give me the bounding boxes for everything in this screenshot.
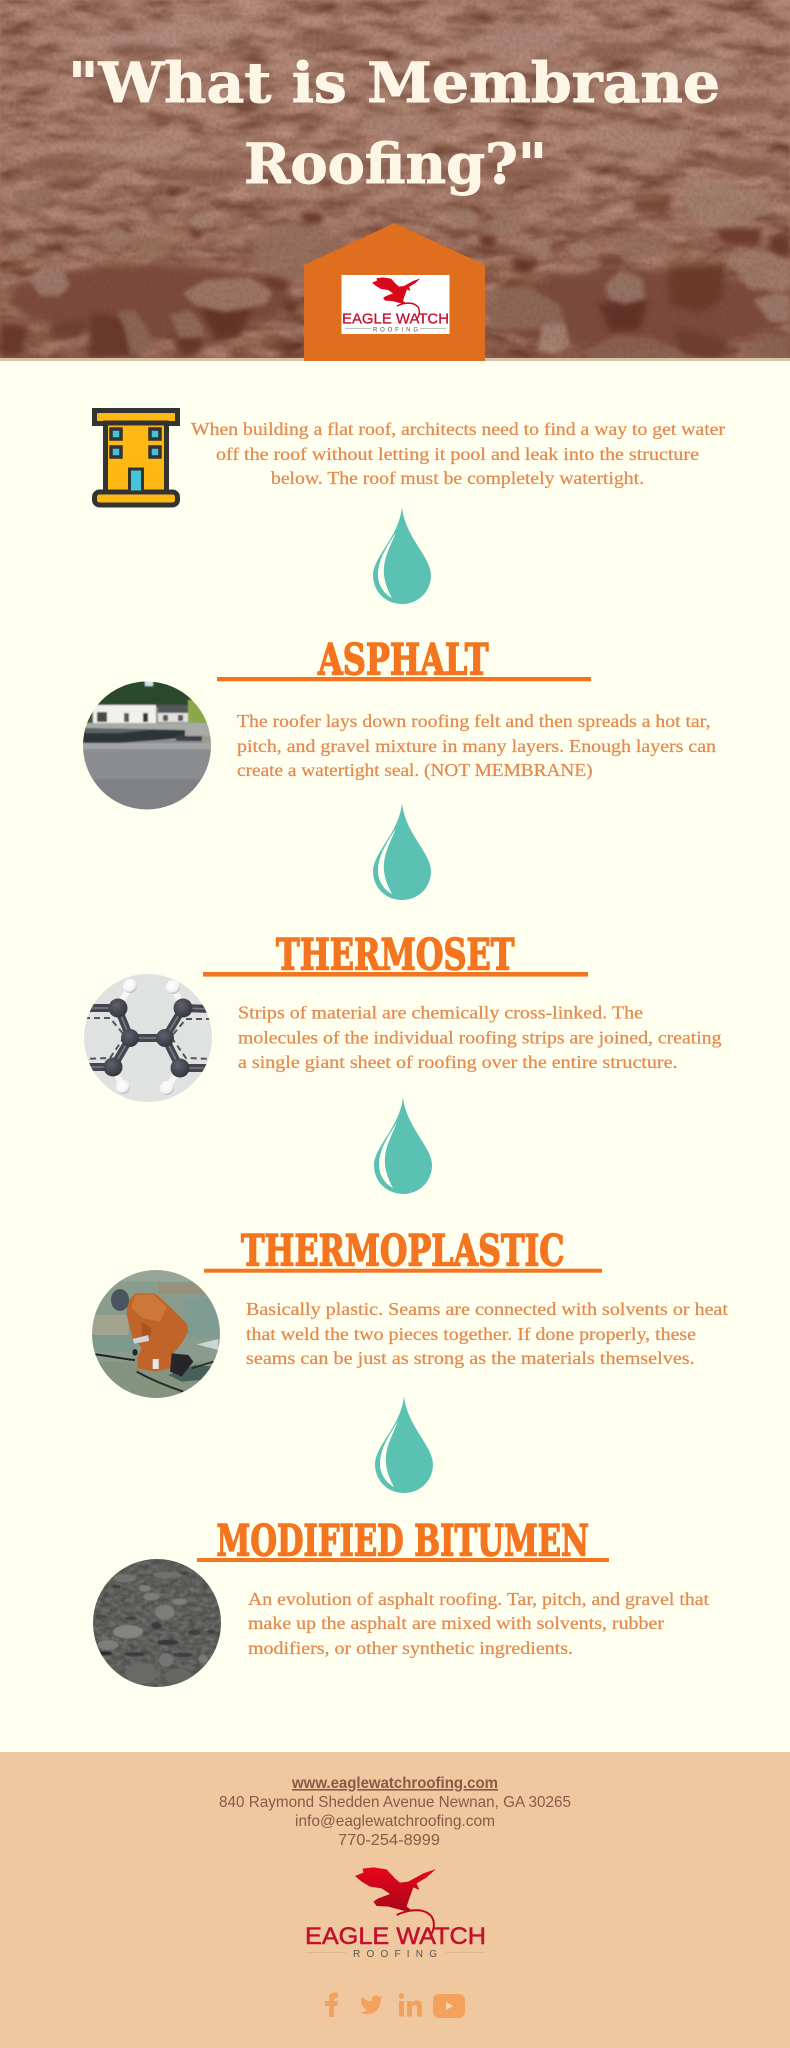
title [68,50,720,196]
intro text: below. The roof must be completely watertight. [271,468,644,488]
bitumen text: make up the asphalt are mixed with solvents, rubber [248,1613,664,1633]
header gravel photo [0,0,790,360]
bitumen text: An evolution of asphalt roofing. Tar, pitch, and gravel that [248,1589,709,1609]
panel: thermoset [84,930,722,1102]
panel: asphalt [78,636,716,816]
icon: water drop 3 [374,1097,432,1194]
contact details: info@eaglewatchroofing.com [295,1813,495,1830]
contact details: 770-254-8999 [338,1832,440,1849]
thermoplastic text [246,1299,728,1368]
panel: footer [0,1752,790,2048]
thermoset text: molecules of the individual roofing strips are joined, creating [238,1028,722,1048]
bitumen text [248,1589,709,1658]
footer logo: ROOFING [353,1949,437,1960]
thermoplastic text: that weld the two pieces together. If done properly, these [246,1324,696,1344]
intro text: off the roof without letting it pool and leak into the structure [216,444,699,464]
thermoplastic text: seams can be just as strong as the materials themselves. [246,1348,695,1368]
thermoplastic text: Basically plastic. Seams are connected with solvents or heat [246,1299,728,1319]
icon: twitter [360,1995,383,2014]
asphalt text: The roofer lays down roofing felt and then spreads a hot tar, [237,711,710,731]
panel: thermoplastic [85,1226,728,1405]
right shadows [668,263,725,313]
photo: molecule [84,974,212,1102]
photo: flat roof [83,682,211,810]
contact details: 840 Raymond Shedden Avenue Newnan, GA 30265 [219,1794,571,1811]
heading: thermoplastic: THERMOPLASTIC [241,1226,564,1276]
panel: header [0,0,790,361]
heading: asphalt: ASPHALT [317,636,488,686]
icon: water drop 4 [375,1396,433,1493]
header logo [342,275,450,334]
social icons [325,1992,465,2018]
icon: youtube [433,1994,465,2018]
intro section [94,410,725,505]
icon: building [94,410,178,505]
title: "What is Membrane [68,50,720,115]
thermoset text [238,1003,722,1072]
asphalt text [237,711,716,781]
intro text [191,419,725,488]
asphalt text: pitch, and gravel mixture in many layers. Enough layers can [237,736,716,756]
thermoset text: a single giant sheet of roofing over the entire structure. [238,1052,678,1072]
right rocks [485,287,565,330]
header bottom edge [0,358,790,361]
panel: modified bitumen [88,1516,709,1695]
intro text: When building a flat roof, architects need to find a way to get water [191,419,725,439]
footer logo: EAGLE WATCH [305,1923,486,1950]
contact details [219,1775,571,1849]
photo: roofer at work [92,1270,220,1398]
icon: water drop 1 [373,507,431,604]
asphalt text: create a watertight seal. (NOT MEMBRANE) [237,760,593,781]
left shadows [200,307,253,340]
heading: modified bitumen: MODIFIED BITUMEN [216,1516,589,1566]
house badge [304,223,485,361]
photo: bitumen gravel [93,1559,221,1687]
contact details: www.eaglewatchroofing.com [291,1775,498,1792]
icon: linkedin [399,1993,422,2016]
footer logo [305,1867,486,1960]
left rocks [183,277,273,312]
heading: thermoset: THERMOSET [276,930,514,980]
header logo: ROOFING [373,328,418,334]
bitumen text: modifiers, or other synthetic ingredients. [248,1638,573,1658]
icon: facebook [325,1992,338,2017]
icon: water drop 2 [373,803,431,900]
header logo: EAGLE WATCH [342,310,449,328]
thermoset text: Strips of material are chemically cross-linked. The [238,1003,643,1023]
title: Roofing?" [244,131,547,196]
